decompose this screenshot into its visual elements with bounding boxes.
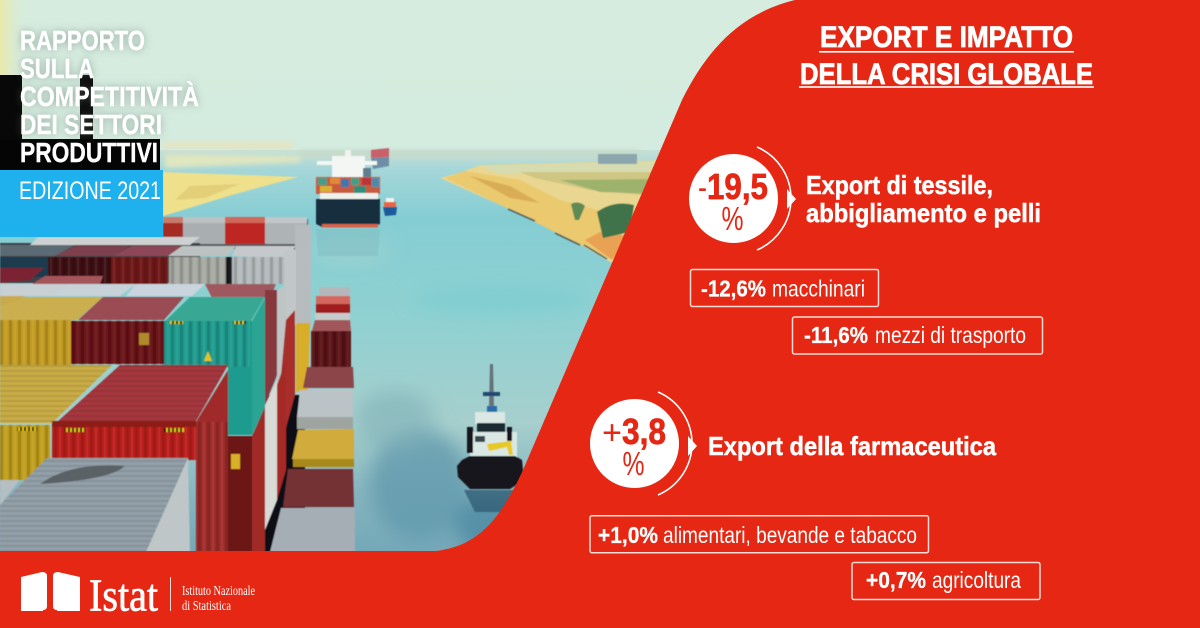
tag: transport -11,6%: -11,6% <box>804 322 868 348</box>
text: textile label: abbigliamento e pelli <box>806 198 1041 228</box>
callout: pharma export +3,8%: 3,8 <box>622 411 666 452</box>
callout: textile export -19,5%: - <box>698 169 707 207</box>
icon: large container ship in the distance <box>316 148 389 256</box>
callout: textile export -19,5% <box>689 147 796 250</box>
title: report name: PRODUTTIVI <box>20 137 158 168</box>
title: report name: COMPETITIVITÀ <box>20 81 199 112</box>
logo: Istat <box>21 570 255 620</box>
logo: Istat: Istituto Nazionale <box>182 584 255 599</box>
icon: open book mark <box>21 572 80 611</box>
logo: Istat: Istat <box>89 570 158 620</box>
title: report name: RAPPORTO <box>20 25 145 56</box>
heading: export and global crisis <box>799 21 1094 91</box>
title: report name <box>20 25 199 168</box>
icon: far bank with vegetation <box>440 154 680 270</box>
text: textile label <box>806 170 1041 228</box>
heading: export and global crisis: EXPORT E IMPATTO <box>820 21 1073 54</box>
tag: machinery -12,6%: -12,6% <box>701 276 766 302</box>
tag: agriculture +0,7%: agricoltura <box>932 567 1021 593</box>
tag: machinery -12,6%: macchinari <box>772 276 865 302</box>
icon: tugboat <box>457 364 524 512</box>
title: report name: RAPPORTO <box>20 25 145 56</box>
tag: agriculture +0,7%: +0,7% <box>866 567 926 593</box>
tag: food +1,0% <box>590 516 928 553</box>
panel: edition colour blocks <box>0 75 163 237</box>
icon: stacks of shipping containers <box>0 217 355 555</box>
callout: pharma export +3,8%: + <box>602 414 622 452</box>
text: edition year: EDIZIONE 2021 <box>19 177 161 205</box>
callout: pharma export +3,8% <box>590 392 697 495</box>
tag: machinery -12,6% <box>690 270 878 306</box>
heading: export and global crisis: DELLA CRISI GLOBALE <box>800 58 1093 91</box>
callout: textile export -19,5%: % <box>722 200 744 237</box>
text: textile label: Export di tessile, <box>806 170 993 200</box>
tag: transport -11,6%: mezzi di trasporto <box>875 322 1026 348</box>
title: report name: DEI SETTORI <box>20 109 162 140</box>
callout: pharma export +3,8%: % <box>622 445 644 482</box>
title: report name: SULLA <box>20 53 94 84</box>
icon: small blue boat <box>383 198 397 216</box>
photo: container ship on canal <box>0 0 800 555</box>
title: report name: DEI SETTORI <box>20 109 162 140</box>
tag: food +1,0%: +1,0% <box>598 522 658 548</box>
logo: Istat: di Statistica <box>182 599 232 614</box>
callout: textile export -19,5%: 19,5 <box>707 166 768 207</box>
tag: transport -11,6% <box>792 317 1042 354</box>
tag: food +1,0%: alimentari, bevande e tabacco <box>663 522 917 548</box>
title: report name: SULLA <box>20 53 94 84</box>
text: pharma label: Export della farmaceutica <box>708 431 996 461</box>
tag: agriculture +0,7% <box>852 562 1040 600</box>
title: report name: COMPETITIVITÀ <box>20 81 199 112</box>
